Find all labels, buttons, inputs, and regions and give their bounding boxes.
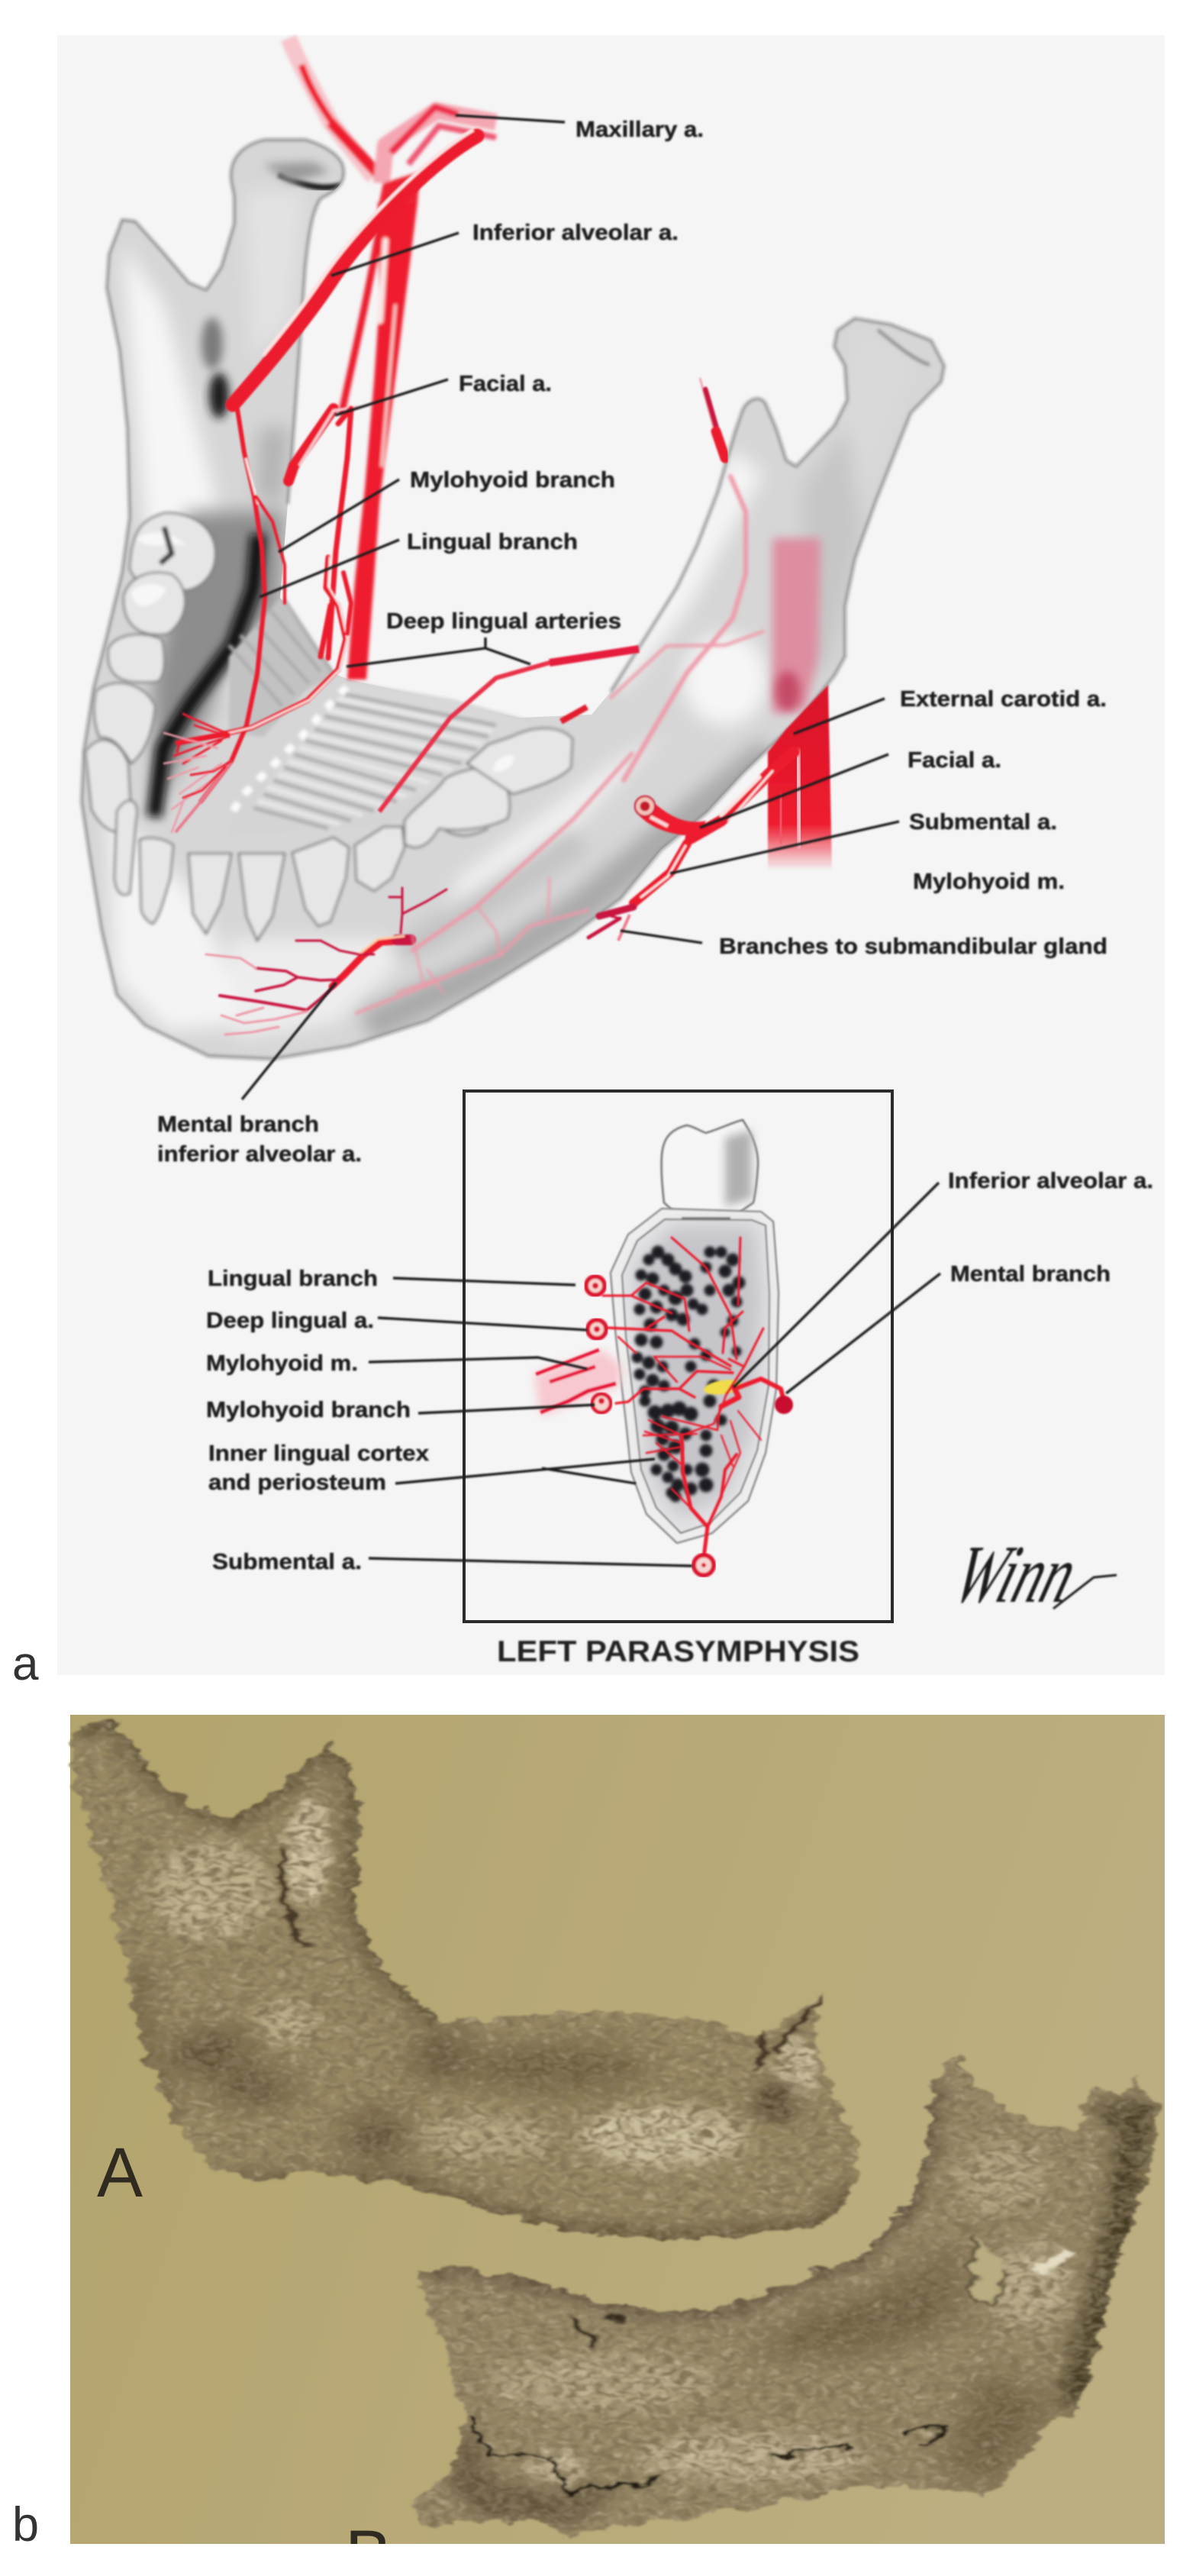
mandible bone: [69, 130, 962, 1069]
cut vessel: submental artery: [694, 1555, 714, 1575]
intraosseous arteries: [603, 1238, 784, 1558]
label: inner lingual cortex and periosteum: Inner lingual cortex: [208, 1441, 429, 1466]
external carotid artery upper trunk: [289, 38, 496, 680]
label: mental branch inferior alveolar artery: inferior alveolar a.: [157, 1142, 362, 1167]
tooth shading: [725, 1130, 752, 1206]
label: mylohyoid muscle inset: Mylohyoid m.: [206, 1351, 358, 1376]
upper ramus vessel stub: [700, 378, 725, 458]
artist signature: Winn: [943, 1528, 1088, 1619]
label: mylohyoid branch inset: Mylohyoid branch: [206, 1398, 411, 1422]
bone cross-section: [611, 1209, 779, 1543]
incisors and canines: [140, 827, 405, 941]
red stain on the ramus: [772, 538, 821, 714]
specimen A: [68, 1714, 873, 2245]
letter A on the photograph: A: [97, 2134, 143, 2212]
label: inferior alveolar artery inset: Inferior alveolar a.: [948, 1169, 1153, 1193]
inset caption: LEFT PARASYMPHYSIS: [497, 1635, 859, 1668]
leader lines of inset: [369, 1183, 940, 1566]
label: lingual branch inset: Lingual branch: [208, 1267, 378, 1291]
inset: left parasymphysis cross-section: [206, 1091, 1153, 1668]
left molars and premolars: [85, 513, 215, 895]
label: mylohyoid muscle: Mylohyoid m.: [913, 870, 1065, 894]
label: lingual branch: Lingual branch: [407, 530, 578, 554]
label: mylohyoid branch: Mylohyoid branch: [410, 468, 615, 492]
inferior alveolar artery: [176, 130, 477, 832]
panel a: anatomical illustration: [57, 35, 1165, 1675]
panel b: photograph of mandible specimens: [68, 1714, 1166, 2576]
lower teeth: [85, 513, 572, 941]
label: deep lingual arteries: Deep lingual arteries: [386, 609, 621, 634]
mylohyoid muscle attachment: [534, 1350, 622, 1416]
pale vessels beneath the bone of the right body: [356, 476, 763, 1013]
label: submental artery inset: Submental a.: [212, 1550, 362, 1574]
label: deep lingual artery inset: Deep lingual a.: [206, 1309, 374, 1333]
label: facial artery: Facial a.: [459, 372, 552, 396]
fan of fine branches at the molar region: [164, 714, 231, 832]
panel label a: a: [12, 1638, 39, 1690]
mylohyoid muscle fibres: [229, 599, 534, 836]
cut vessel: mylohyoid branch: [592, 1394, 611, 1412]
label: inferior alveolar artery: Inferior alveolar a.: [472, 221, 679, 245]
cut vessel: lingual branch: [586, 1277, 605, 1295]
label: external carotid artery: External carotid a.: [900, 687, 1107, 712]
inset frame: [464, 1091, 892, 1622]
label: inner lingual cortex and periosteum: and periosteum: [208, 1470, 386, 1495]
external carotid artery lower trunk: [768, 685, 832, 870]
inferior alveolar nerve: [703, 1378, 743, 1396]
label: mental branch inferior alveolar artery: Mental branch: [157, 1112, 319, 1137]
label: maxillary artery: Maxillary a.: [575, 118, 704, 142]
facial artery cut stump and branches: [635, 752, 794, 838]
label: mental branch inset: Mental branch: [950, 1262, 1111, 1286]
photograph background: [70, 1715, 1165, 2544]
leader lines of main view: [242, 115, 899, 1099]
facial artery and lingual branches: [178, 407, 359, 743]
label: branches to submandibular gland: Branches to submandibular gland: [719, 935, 1107, 959]
panel label b: b: [12, 2498, 39, 2552]
label: submental artery: Submental a.: [909, 810, 1057, 834]
deep lingual artery: [379, 649, 639, 812]
cut vessel: mental branch: [775, 1396, 793, 1414]
specimen B: [406, 2045, 1166, 2549]
branching vessels on the mental region: [206, 888, 447, 1035]
right premolars and molars: [405, 728, 572, 847]
trabecular marrow spaces: [633, 1247, 744, 1501]
labels of inset: [206, 1169, 1153, 1668]
labels of main view: [157, 118, 1107, 1167]
cut vessel: deep lingual artery: [588, 1320, 606, 1338]
submental artery and gland branches: [588, 844, 687, 941]
label: facial artery right: Facial a.: [908, 748, 1001, 773]
tooth crown: [662, 1120, 758, 1219]
illustration background: [57, 35, 1165, 1675]
